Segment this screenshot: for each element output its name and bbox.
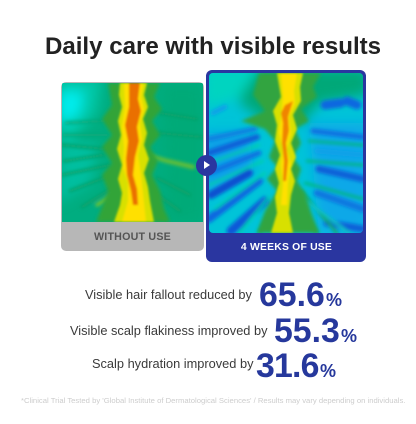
heatmap: 4 weeks of use <box>209 73 363 233</box>
stat: scalp hydration <box>92 347 336 385</box>
icon: arrow badge <box>196 155 217 176</box>
footnote: *Clinical Trial Tested by 'Global Institute of Dermatological Sciences' / Results may vary depending on individuals. <box>21 396 405 405</box>
stat: hair fallout <box>85 276 342 314</box>
stat: scalp flakiness <box>70 312 357 350</box>
stat: scalp hydration: 31.6 <box>256 347 319 385</box>
stat: scalp hydration: Scalp hydration improved by <box>92 356 253 371</box>
stat: scalp hydration: % <box>320 361 336 381</box>
stat: scalp flakiness: % <box>341 326 357 346</box>
panel: without use <box>61 82 204 251</box>
heatmap: without use <box>62 83 203 222</box>
stat: scalp flakiness: 55.3 <box>274 312 340 350</box>
title: Daily care with visible results <box>45 33 381 60</box>
stat: hair fallout: Visible hair fallout reduced by <box>85 287 252 302</box>
stat: hair fallout: 65.6 <box>259 276 325 314</box>
stat: scalp flakiness: Visible scalp flakiness improved by <box>70 323 268 338</box>
label: without use: WITHOUT USE <box>94 231 171 243</box>
label: 4 weeks of use: 4 WEEKS OF USE <box>241 242 332 253</box>
stat: hair fallout: % <box>326 290 342 310</box>
panel: 4 weeks of use <box>206 70 366 262</box>
